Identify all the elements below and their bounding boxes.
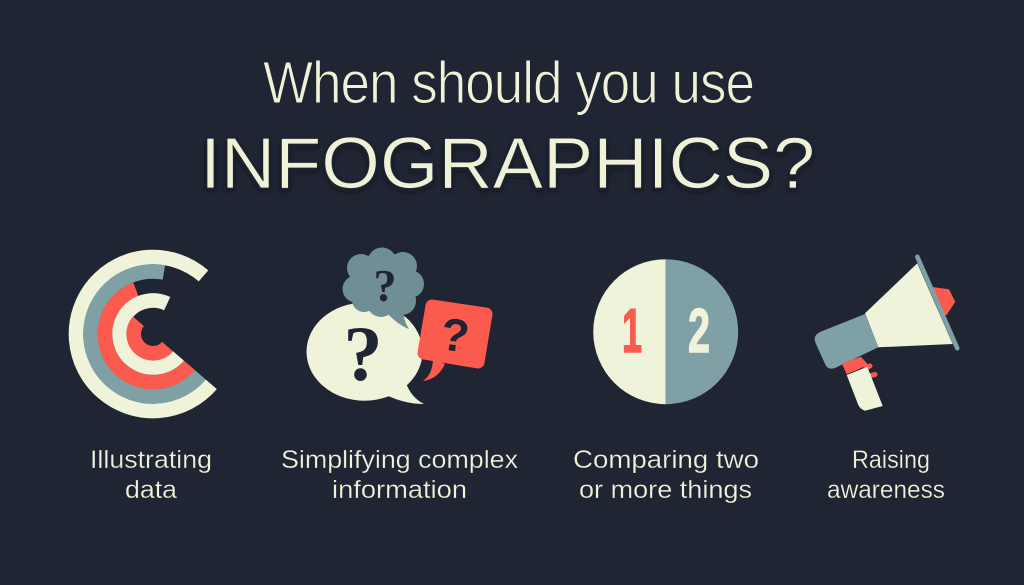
title line 1: When should you use [263, 49, 755, 116]
label: illustrating data [90, 446, 212, 504]
label: illustrating data: Illustrating [90, 446, 212, 474]
label: raising awareness: awareness [827, 476, 945, 504]
red speech bubble: ? [437, 307, 473, 363]
cream speech bubble [306, 303, 424, 404]
teal thought cloud: ? [374, 260, 396, 311]
title [200, 49, 815, 204]
icon: comparison circle with 1 and 2: 1 [622, 297, 642, 366]
icon: concentric radial chart [76, 257, 211, 411]
icon: comparison circle with 1 and 2 [593, 259, 738, 404]
label: raising awareness: Raising [852, 446, 930, 474]
label: simplifying complex information: Simplifying complex [281, 446, 519, 474]
icon: speech bubbles with question marks [306, 248, 486, 404]
teal thought cloud [342, 248, 424, 329]
icon: comparison circle with 1 and 2: 2 [688, 297, 710, 366]
label: raising awareness [827, 446, 945, 504]
label: comparing two or more things: or more things [579, 476, 752, 504]
label: simplifying complex information: information [332, 476, 467, 504]
label: comparing two or more things [573, 446, 759, 504]
title line 2: INFOGRAPHICS? [200, 124, 815, 204]
icon: megaphone [815, 257, 957, 411]
label: illustrating data: data [125, 476, 177, 504]
red speech bubble [423, 306, 486, 381]
label: comparing two or more things: Comparing two [573, 446, 759, 474]
label: simplifying complex information [281, 446, 519, 504]
cream speech bubble: ? [344, 310, 382, 397]
